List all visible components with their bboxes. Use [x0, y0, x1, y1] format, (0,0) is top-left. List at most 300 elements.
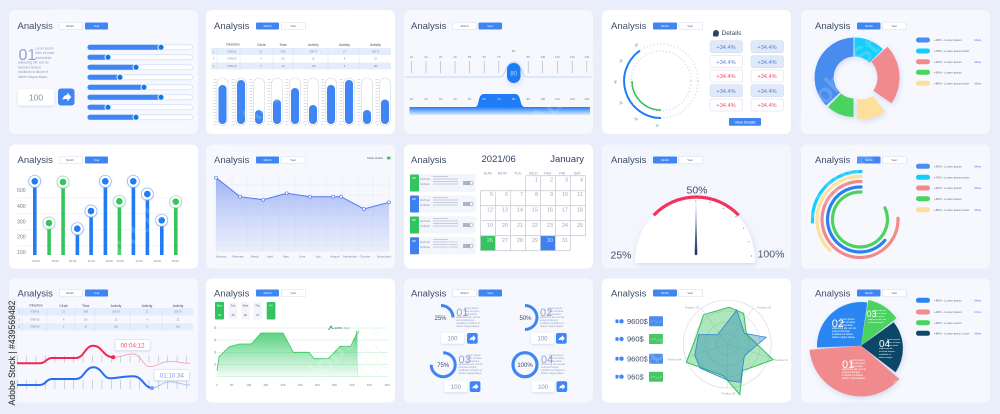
ring 75 percent: eiusmod tempor: [458, 366, 477, 369]
legend: +40% - Lorem ipsum: [934, 186, 962, 190]
toggle buttons: Year: [891, 24, 897, 28]
x axis labels: 350: [332, 383, 337, 387]
text block: dolor sit amet,: [35, 51, 55, 55]
text block: adipiscing elit, sed do: [18, 61, 49, 65]
legend: +80% - Lorem ipsum dolor: [934, 82, 969, 86]
data table: 209.79: [310, 50, 318, 54]
upper scale: 70: [497, 55, 501, 59]
calendar grid: [480, 176, 586, 251]
ring 100 percent: incididunt ut labore et: [541, 369, 565, 372]
pie labels: consectetur: [850, 365, 863, 368]
y axis labels: 300: [17, 220, 26, 226]
data table: ITEM 03: [227, 65, 237, 68]
ring 25 percent: dolore magna aliqua.: [456, 325, 480, 328]
icon: details: [713, 30, 719, 36]
pie labels: incididunt ut labore: [842, 374, 864, 377]
ring 25 percent: adipiscing elit, sed do: [456, 316, 481, 319]
radial arcs: [812, 171, 898, 257]
value chips: +34.4%: [716, 103, 736, 109]
weekday row: MON: [498, 172, 507, 176]
pie labels: Lorem ipsum: [850, 359, 864, 362]
upper scale: [405, 49, 592, 83]
data table: 21: [260, 50, 263, 54]
x axis labels: 250: [298, 383, 303, 387]
toggle buttons: Year: [687, 291, 693, 295]
calendar grid: 7: [520, 192, 523, 198]
data table: Activity: [308, 43, 319, 47]
data table: 3: [213, 65, 215, 68]
calendar grid: 25: [577, 223, 583, 229]
data table: 1: [18, 310, 20, 314]
legend: More: [974, 186, 982, 190]
pie labels: adipiscing elit, sed do: [832, 327, 857, 330]
calendar grid: 5: [490, 192, 493, 198]
data table: 5: [146, 326, 148, 328]
ring 50 percent: 50%: [519, 316, 532, 322]
pie labels: dolor sit amet,: [850, 362, 866, 365]
data table: ITEM 01: [30, 310, 40, 314]
weekday row: THU: [543, 172, 551, 176]
toggle buttons: Year: [94, 24, 99, 28]
ring 25 percent: 01: [456, 307, 469, 319]
toggle buttons: Year: [891, 291, 897, 295]
ring 50 percent: 100: [537, 336, 548, 342]
data table: 20: [84, 326, 88, 328]
pie labels: eiusmod tempor: [868, 321, 884, 324]
calendar grid: 24: [562, 223, 568, 229]
title: Analysis: [214, 288, 250, 300]
ring 100 percent: adipiscing elit, sed do: [541, 363, 566, 366]
pie labels: [832, 309, 901, 380]
event list: 11:00 am: [420, 225, 430, 228]
ring 75 percent: 75%: [437, 363, 450, 369]
toggle buttons: Month: [461, 24, 469, 28]
toggle buttons: [256, 290, 306, 296]
price list: 960$: [627, 335, 645, 344]
data table: 100: [312, 65, 316, 68]
panel: table and timelines: [9, 278, 198, 402]
calendar grid: 4: [580, 178, 583, 184]
data table: 22: [177, 318, 180, 322]
x axis labels: 14:00: [135, 259, 143, 263]
dashboard collage: Adobe Stock: [103, 130, 237, 264]
toggle buttons: [60, 22, 108, 30]
ring 75 percent: [431, 353, 483, 392]
data table: 9:99: [83, 310, 89, 314]
ring 50 percent: consectetur: [548, 313, 561, 316]
title: Analysis: [214, 21, 250, 32]
title: Analysis: [815, 288, 851, 300]
gauge labels: 50%: [686, 184, 708, 196]
title: Analysis: [611, 155, 647, 166]
ring 25 percent: incididunt ut labore et: [456, 322, 480, 325]
data table: 4: [63, 318, 65, 322]
data table: 8: [344, 58, 346, 60]
callout: red time: [115, 340, 150, 350]
x axis labels: 11:00: [87, 259, 95, 263]
weekday selector: Thu: [255, 304, 261, 308]
daily charts toggle: [367, 156, 391, 160]
legend: +80% - Lorem ipsum dolor: [934, 332, 969, 336]
panel: sliders: [9, 10, 198, 134]
needle: [695, 202, 697, 255]
radar plot: Position 02: [757, 306, 772, 310]
data table: 100: [374, 65, 378, 68]
text block: dolore magna aliqua.: [18, 75, 48, 79]
pie labels: incididunt ut: [879, 353, 891, 356]
x axis labels: 16:00: [171, 259, 179, 263]
toggle buttons: [256, 22, 306, 30]
month labels: May: [283, 254, 289, 258]
data table: 9:99: [281, 50, 286, 54]
weekday selector: 25: [231, 313, 235, 317]
value chips: +34.4%: [757, 103, 777, 109]
data table: 209.79: [174, 310, 182, 314]
weekday selector: Fri: [269, 304, 273, 308]
donut: [815, 37, 900, 119]
price list: 9600$: [627, 317, 649, 326]
hatched forecast area: [357, 328, 388, 377]
value box: [18, 89, 54, 106]
toggle buttons: Year: [487, 24, 493, 28]
legend: More: [974, 60, 982, 64]
upper scale: 10: [410, 55, 413, 59]
daily charts toggle: Daily charts: [367, 156, 383, 160]
toggle buttons: [256, 156, 306, 164]
ring 25 percent: eiusmod tempor: [456, 319, 474, 322]
radar plot: Position 03: [685, 306, 699, 310]
event list: FRI: [412, 219, 416, 222]
dashboard collage: Adobe Stock: [233, 0, 367, 134]
pie labels: dolore magna aliqua.: [832, 336, 856, 339]
toggle buttons: Month: [661, 158, 669, 162]
dashboard collage: Adobe Stock: [423, 140, 557, 274]
lower scale band: 50: [468, 97, 472, 101]
pie labels: Lorem ipsum: [887, 338, 900, 341]
lower scale band: 100: [540, 97, 546, 101]
ring 75 percent: adipiscing elit, sed do: [458, 363, 483, 366]
weekday selector: Wed: [242, 304, 249, 308]
legend: +30% - Lorem ipsum: [934, 38, 962, 42]
red timeline: [17, 346, 190, 367]
data table: 22: [312, 58, 315, 60]
toggle buttons: [653, 22, 703, 30]
event list: 10:27 am: [420, 220, 430, 223]
weekday row: TUE: [514, 172, 522, 176]
calendar grid: 10: [562, 192, 568, 198]
view details button: [729, 118, 761, 126]
month labels: August: [330, 254, 340, 258]
lower scale band: 40: [453, 97, 457, 101]
data table: Activity: [339, 43, 350, 47]
x axis labels: 100: [246, 383, 252, 387]
calendar grid: 18: [577, 208, 583, 214]
pie labels: consectetur: [840, 324, 853, 327]
ring 100 percent: consectetur: [549, 360, 562, 363]
data table: Activity: [370, 43, 381, 47]
ring 100 percent: dolor sit amet,: [549, 357, 565, 360]
toggle buttons: [857, 290, 906, 296]
x axis labels: 200: [280, 383, 286, 387]
x axis labels: 15:00: [153, 259, 161, 263]
text block: consectetur: [35, 56, 52, 60]
capsule bar chart: [215, 78, 390, 126]
weekday row: FRI: [559, 172, 565, 176]
data table: 5:5: [84, 318, 88, 322]
data table: 209.79: [112, 310, 120, 314]
calendar grid: 28: [517, 238, 523, 244]
toggle buttons: [857, 22, 906, 30]
data table: 5: [344, 65, 346, 68]
data table: Circle: [59, 304, 68, 308]
title: Analysis: [18, 155, 53, 166]
pie labels: incididunt ut labore: [832, 333, 854, 336]
data table: ITEM 03: [30, 326, 40, 328]
lower scale band: 130: [584, 97, 590, 101]
ring 75 percent: 100: [451, 385, 462, 391]
toggle buttons: Month: [865, 291, 873, 295]
data table: 209.79: [372, 50, 380, 54]
calendar grid: 20: [502, 223, 508, 229]
data table: 2: [213, 58, 215, 60]
y axis labels: [214, 326, 216, 367]
legend: More: [974, 208, 982, 212]
ring 50 percent: incididunt ut labore et: [540, 322, 564, 325]
x axis labels: 50: [230, 383, 234, 387]
pie labels: 03: [866, 309, 877, 319]
x axis labels: 300: [315, 383, 320, 387]
calendar grid: 26: [487, 238, 493, 244]
dashboard collage: Adobe Stock: [743, 140, 877, 274]
calendar grid: 21: [517, 223, 523, 229]
value box: 100: [29, 92, 43, 102]
ring 50 percent: dolor sit amet,: [548, 310, 564, 313]
panel: radar chart: [602, 278, 791, 402]
gauge labels: 25%: [610, 250, 632, 262]
x axis labels: 12:00: [105, 259, 113, 263]
growth label: [328, 326, 350, 330]
calendar grid: 8: [535, 192, 538, 198]
toggle buttons: [857, 156, 906, 164]
green area chart: [217, 331, 359, 377]
data table: ITEM 02: [30, 318, 40, 322]
ring 100 percent: [513, 353, 567, 392]
calendar grid: 2: [550, 178, 553, 184]
calendar grid: 30: [547, 238, 553, 244]
data table: 22: [374, 58, 377, 60]
calendar grid: 23: [547, 223, 553, 229]
weekday row: [484, 172, 581, 176]
calendar grid: 1: [535, 178, 538, 184]
toggle buttons: Month: [461, 291, 469, 295]
pie labels: Lorem ipsum: [873, 309, 886, 312]
value chips: [710, 41, 784, 111]
data table: Activity: [142, 304, 153, 308]
ring 100 percent: eiusmod tempor: [541, 366, 559, 369]
data table: Time: [279, 43, 287, 47]
legend: +40% - Lorem ipsum: [934, 60, 962, 64]
radial gauge: 30: [618, 100, 624, 105]
icon: share button: [58, 88, 74, 106]
lower scale band: 10: [410, 97, 413, 101]
value chips: +34.4%: [757, 45, 777, 51]
value chips: +34.4%: [716, 45, 736, 51]
toggle buttons: Month: [865, 158, 873, 162]
panel: lollipop chart: [9, 144, 198, 268]
y axis labels: 5: [214, 326, 216, 330]
legend: More: [974, 332, 982, 336]
x axis labels: [216, 383, 390, 387]
weekday selector: [215, 302, 275, 320]
data table: 20: [282, 65, 285, 68]
weekday row: WED: [529, 172, 538, 176]
data table: 4: [260, 58, 262, 60]
calendar grid: 31: [562, 238, 568, 244]
toggle buttons: Month: [66, 291, 74, 295]
ring 25 percent: dolor sit amet,: [464, 310, 480, 313]
data table: [211, 43, 391, 70]
legend: +80% - Lorem ipsum dolor: [934, 208, 969, 212]
ring 25 percent: 25%: [434, 316, 447, 322]
ring 75 percent: 03: [458, 354, 471, 366]
data table: 21: [62, 310, 66, 314]
pie labels: dolor sit amet,: [873, 312, 887, 315]
legend: More: [974, 82, 982, 86]
calendar grid: 11: [577, 192, 583, 198]
month labels: April: [267, 254, 273, 258]
data table: 21: [146, 310, 149, 314]
upper scale: 120: [570, 55, 575, 59]
panel: four progress rings: [404, 278, 593, 402]
panel: circular progress and details: [602, 10, 791, 134]
value chips: +34.4%: [716, 74, 736, 80]
calendar grid: 15: [532, 208, 538, 214]
upper scale: 100: [540, 55, 546, 59]
ring 100 percent: dolore magna aliqua.: [541, 372, 565, 375]
panel: gauge: [602, 144, 791, 268]
radar plot: Position 01: [774, 358, 788, 362]
ring 25 percent: 100: [447, 336, 458, 342]
data table: Time: [82, 304, 90, 308]
ring 50 percent: eiusmod tempor: [540, 319, 558, 322]
legend: +70% - Lorem ipsum dolor: [934, 176, 969, 180]
legend: [916, 38, 982, 86]
ring 100 percent: 04: [541, 354, 553, 366]
title: Analysis: [411, 288, 447, 300]
pie labels: dolor sit amet,: [887, 341, 901, 344]
calendar grid: 29: [532, 238, 538, 244]
title: Analysis: [611, 21, 647, 32]
upper scale: 80: [512, 49, 516, 53]
ring 50 percent: adipiscing elit, sed do: [540, 316, 565, 319]
pie labels: dolore magna: [879, 356, 893, 359]
slider group: [88, 44, 192, 120]
calendar grid: 12: [487, 208, 493, 214]
pie labels: dolor sit amet,: [840, 321, 856, 324]
weekday row: SAT: [574, 172, 581, 176]
upper scale: 130: [584, 55, 590, 59]
y axis labels: 200: [17, 234, 26, 240]
ring 100 percent: Lorem ipsum: [549, 354, 563, 357]
x axis labels: 10:30: [69, 259, 77, 263]
pie labels: consectetur: [887, 344, 899, 347]
text block: Lorem ipsum: [35, 46, 54, 50]
data table: 2: [18, 318, 20, 322]
data table: ITEM 02: [227, 58, 237, 60]
ring 100 percent: 100%: [517, 363, 533, 369]
toggle buttons: Month: [264, 291, 272, 295]
ring 50 percent: [519, 306, 567, 344]
data table: [17, 304, 193, 331]
data table: 1: [213, 50, 215, 54]
month labels: July: [315, 254, 321, 258]
ring 75 percent: consectetur: [466, 360, 480, 363]
area line chart: [214, 176, 390, 252]
calendar grid: 6: [505, 192, 508, 198]
data table: 5:5: [281, 58, 285, 60]
month labels: November: [377, 254, 391, 258]
month labels: January: [216, 254, 227, 258]
y axis labels: 3: [214, 350, 216, 354]
event list: [410, 174, 476, 254]
pie labels: eiusmod tempor: [879, 350, 895, 353]
title: Analysis: [611, 288, 647, 300]
title: Analysis: [18, 288, 53, 300]
upper scale: 30: [439, 55, 443, 59]
weekday selector: 26: [244, 313, 247, 317]
watermark id strip: Adobe Stock | #439569482: [7, 300, 17, 406]
event list: 11:00 am: [420, 183, 430, 186]
weekday selector: 24: [218, 313, 221, 317]
ring 25 percent: [434, 306, 481, 344]
calendar grid: 17: [562, 208, 568, 214]
month labels: [216, 254, 391, 258]
y axis labels: 500: [17, 188, 26, 194]
toggle buttons: [452, 22, 502, 30]
upper scale: 60: [483, 55, 486, 59]
event list: FRI: [412, 240, 416, 243]
data table: Direction: [226, 43, 240, 47]
legend: +60% - Lorem ipsum: [934, 197, 962, 201]
toggle buttons: Year: [290, 158, 296, 162]
toggle buttons: Year: [290, 291, 296, 295]
lower scale band: 70: [497, 97, 501, 101]
legend: +80% - Lorem ipsum: [934, 298, 962, 302]
legend: +60% - Lorem ipsum: [934, 321, 962, 325]
value chips: +34.4%: [757, 89, 777, 95]
weekday row: SUN: [484, 172, 492, 176]
legend: More: [974, 310, 982, 314]
pie slices: [810, 300, 903, 396]
legend: More: [974, 298, 982, 302]
radial gauge: 20: [633, 116, 639, 122]
calendar grid: 14: [517, 208, 523, 214]
upper scale: 50: [468, 55, 472, 59]
legend: +70% - Lorem ipsum dolor: [934, 49, 969, 53]
legend: [916, 298, 982, 336]
slider knob: [507, 63, 520, 83]
x axis labels: 09:00: [32, 259, 40, 263]
ring 75 percent: dolor sit amet,: [466, 357, 483, 360]
toggle buttons: [452, 290, 502, 296]
toggle buttons: [653, 290, 703, 296]
toggle buttons: Year: [687, 158, 693, 162]
legend: More: [974, 164, 982, 168]
ring 75 percent: incididunt ut labore et: [458, 369, 483, 372]
upper scale: 40: [453, 55, 457, 59]
data table: Direction: [29, 304, 43, 308]
legend: +50% - Lorem ipsum: [934, 164, 962, 168]
